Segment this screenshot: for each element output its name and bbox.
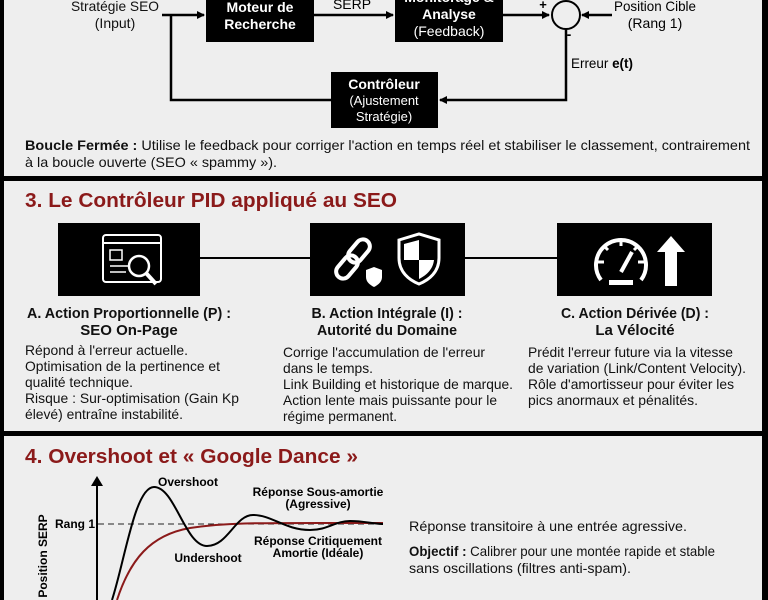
heading 4: 4. Overshoot et « Google Dance » [25,446,358,468]
icon box: authority [310,223,465,296]
column B: integral: dans le temps. [283,360,373,376]
box: moteur de recherche [206,0,314,42]
box: monitoring & analyse: Analyse [422,6,476,22]
text: objective: Objectif : Calibrer pour une montée rapide et stable [409,543,715,559]
column A: proportional: Risque : Sur-optimisation (Gain Kp [25,390,239,406]
column B: integral [283,305,513,424]
comparator circle [552,1,580,42]
column C: derivative: de variation (Link/Content Velocity). [528,360,746,376]
feedback loop line [171,15,331,100]
column C: derivative: Prédit l'erreur future via la vitesse [528,344,733,360]
text: Strategie SEO input [71,0,159,31]
icon box: velocity [557,223,712,296]
panel: PID controller [4,181,762,431]
panel: overshoot [4,436,762,600]
arrow: position cible [582,0,696,31]
comparator circle: - [567,26,572,42]
column B: integral: Action lente mais puissante pour le [283,392,497,408]
panel: closed loop diagram [4,0,762,176]
column A: proportional: Répond à l'erreur actuelle. [25,342,188,358]
column C: derivative: Rôle d'amortisseur pour éviter les [528,376,734,392]
chart: step response: Amortie (Idéale) [273,546,363,560]
chart: step response: Undershoot [174,551,242,565]
column C: derivative: La Vélocité [595,322,675,339]
chart: step response [36,475,384,600]
column C: derivative: pics anormaux et pénalités. [528,392,698,408]
arrow: SERP [314,0,393,15]
box: controleur: Stratégie) [356,109,412,124]
chart: step response: (Agressive) [285,497,351,511]
column B: integral: Link Building et historique de marque. [283,376,513,392]
chart: step response: Réponse Sous-amortie [253,485,384,499]
column B: integral: Autorité du Domaine [317,322,457,339]
box: controleur: (Ajustement [349,93,419,108]
box: controleur: Contrôleur [348,76,420,92]
text: boucle fermee [25,137,750,170]
arrow: input to moteur [162,14,204,16]
column B: integral: B. Action Intégrale (I) : [312,305,462,322]
column A: proportional: Optimisation de la pertinence et [25,358,220,374]
chart: step response: Réponse Critiquement [254,534,382,548]
connector lines [200,257,557,259]
text: objective [409,518,715,576]
chart: step response: Overshoot [158,475,218,489]
arrow: position cible: (Rang 1) [628,15,682,31]
column C: derivative [528,305,746,408]
box: monitoring & analyse [395,0,503,42]
heading 3: 3. Le Contrôleur PID appliqué au SEO [25,190,397,212]
icon box: on-page [58,223,200,296]
box: moteur de recherche: Recherche [224,16,296,32]
column A: proportional [25,305,239,422]
error line [440,29,633,100]
column B: integral: régime permanent. [283,408,397,424]
column C: derivative: C. Action Dérivée (D) : [561,305,709,322]
column A: proportional: SEO On-Page [80,322,178,339]
box: controleur [331,72,438,128]
error line: Erreur e(t) [571,55,633,71]
chart: step response: Position SERP [36,514,50,598]
text: Strategie SEO input: (Input) [95,15,135,31]
column A: proportional: élevé) entraîne instabilité. [25,406,183,422]
column A: proportional: A. Action Proportionnelle (P) : [27,305,231,322]
column B: integral: Corrige l'accumulation de l'erreur [283,344,485,360]
box: monitoring & analyse: (Feedback) [414,23,484,39]
column A: proportional: qualité technique. [25,374,133,390]
arrow: to comparator [503,0,549,15]
chart: step response: Rang 1 [55,517,95,531]
text: objective: sans oscillations (filtres anti-spam). [409,560,631,576]
text: objective: Réponse transitoire à une entrée agressive. [409,518,687,534]
text: boucle fermee: Boucle Fermée : Utilise le feedback pour corriger l'action en temps réel et stabiliser le classement, contrairement [25,137,750,153]
text: boucle fermee: à la boucle ouverte (SEO « spammy »). [25,154,277,170]
